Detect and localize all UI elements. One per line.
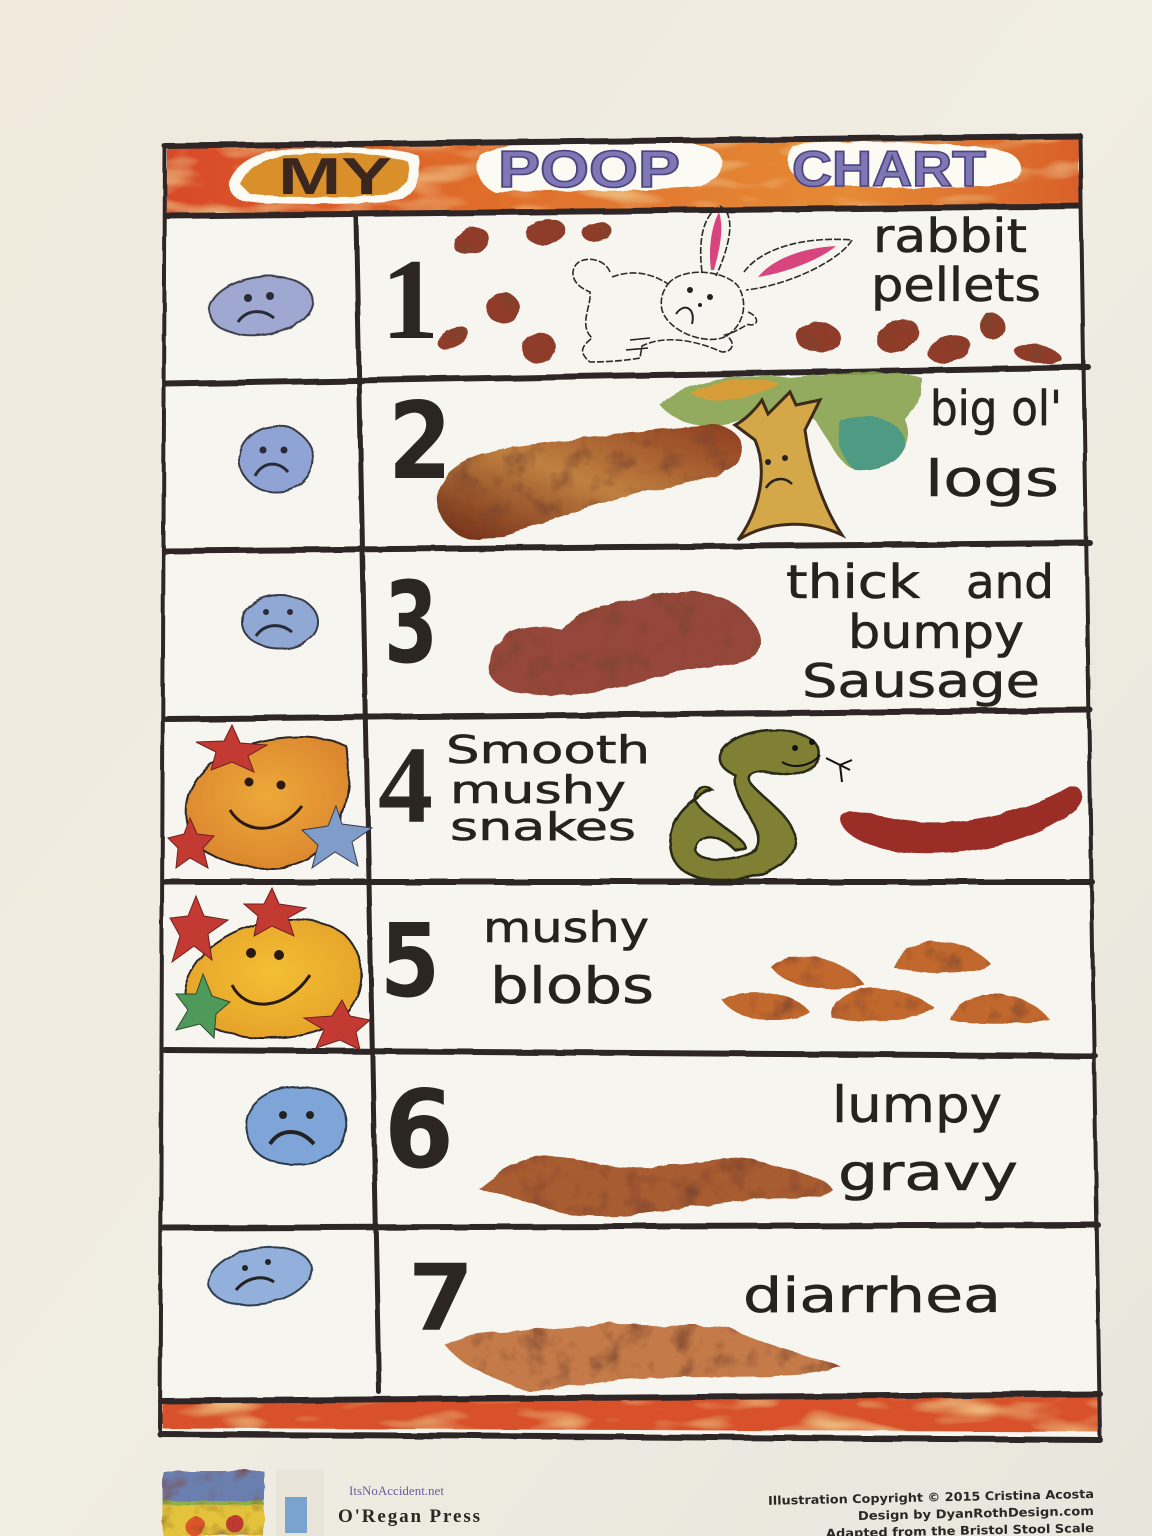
icon: sad tree [660,373,922,540]
label: smooth mushy snakes: snakes [450,805,636,849]
icon: blobs [722,941,1050,1024]
label: mushy blobs [483,903,654,1015]
label: smooth mushy snakes: Smooth [446,728,650,772]
footer: credits: Illustration Copyright © 2015 Cristina Acosta [768,1487,1094,1508]
label: big ol' logs: big ol' [930,381,1062,437]
chart paper [160,135,1100,1440]
label: thick and bumpy sausage: and [966,555,1054,609]
title word: POOP: POOP [498,141,680,199]
icon: log [438,425,741,540]
label: diarrhea: diarrhea [743,1268,1001,1324]
bottom band [162,1396,1100,1432]
row 1: rabbit pellets [205,206,1062,368]
label: lumpy gravy: gravy [838,1144,1018,1202]
face: sad 6 [246,1087,346,1164]
face: sad 2 [239,426,313,492]
label: rabbit pellets: pellets [871,258,1041,312]
face: happy 5 with stars [170,888,370,1050]
icon: snake [670,730,852,880]
label: mushy blobs: mushy [483,903,649,952]
panel: chart [160,135,1100,1440]
label: thick and bumpy sausage [786,555,1054,708]
row 7: diarrhea [204,1239,1001,1392]
label: thick and bumpy sausage: Sausage [802,654,1040,708]
label: lumpy gravy: lumpy [832,1076,1002,1134]
label: smooth mushy snakes [446,728,650,849]
footer: publisher: O'Regan Press [338,1506,481,1527]
title word: MY: MY [278,148,392,206]
row 5: mushy blobs [170,888,1050,1050]
label: rabbit pellets: rabbit [873,209,1027,263]
icon: lumpy gravy [478,1156,833,1217]
row 2: big ol' logs [239,373,1062,540]
icon: rabbit [573,206,852,362]
number 4: 4 [378,724,433,846]
pellets [434,217,1062,368]
footer: credits: Design by DyanRothDesign.com [858,1504,1094,1523]
footer: book cover thumbnail [163,1471,264,1536]
icon: smooth log [840,787,1082,854]
number 2: 2 [388,380,452,503]
label: mushy blobs: blobs [490,957,654,1015]
title word: CHART: CHART [792,141,986,197]
title word: POOP [477,141,722,199]
face: happy 4 with stars [168,725,372,869]
face: sad 1 [205,270,317,342]
icon: bumpy sausage [490,592,762,696]
title word: MY [229,148,420,206]
label: big ol' logs [925,381,1062,508]
label: thick and bumpy sausage: thick [786,555,920,609]
footer: credits [768,1487,1094,1536]
label: big ol' logs: logs [925,450,1059,508]
number 1: 1 [381,236,439,364]
number 5: 5 [380,902,440,1021]
row 4: smooth mushy snakes [168,724,1082,880]
label: rabbit pellets [871,209,1041,312]
label: thick and bumpy sausage: bumpy [848,605,1024,659]
row 3: thick and bumpy sausage [242,555,1054,708]
label: lumpy gravy [832,1076,1018,1202]
number 7: 7 [408,1245,474,1352]
icon: diarrhea [445,1322,842,1392]
header band [167,138,1080,214]
footer: second book thumbnail [276,1470,324,1536]
face: sad 7 [204,1239,316,1313]
row 6: lumpy gravy [246,1068,1018,1217]
number 3: 3 [384,559,438,689]
number 6: 6 [384,1068,454,1193]
table lines [160,136,1100,1440]
face: sad 3 [242,595,318,649]
footer: publisher [338,1483,481,1527]
label: smooth mushy snakes: mushy [450,768,626,812]
footer: publisher: ItsNoAccident.net [349,1483,444,1498]
